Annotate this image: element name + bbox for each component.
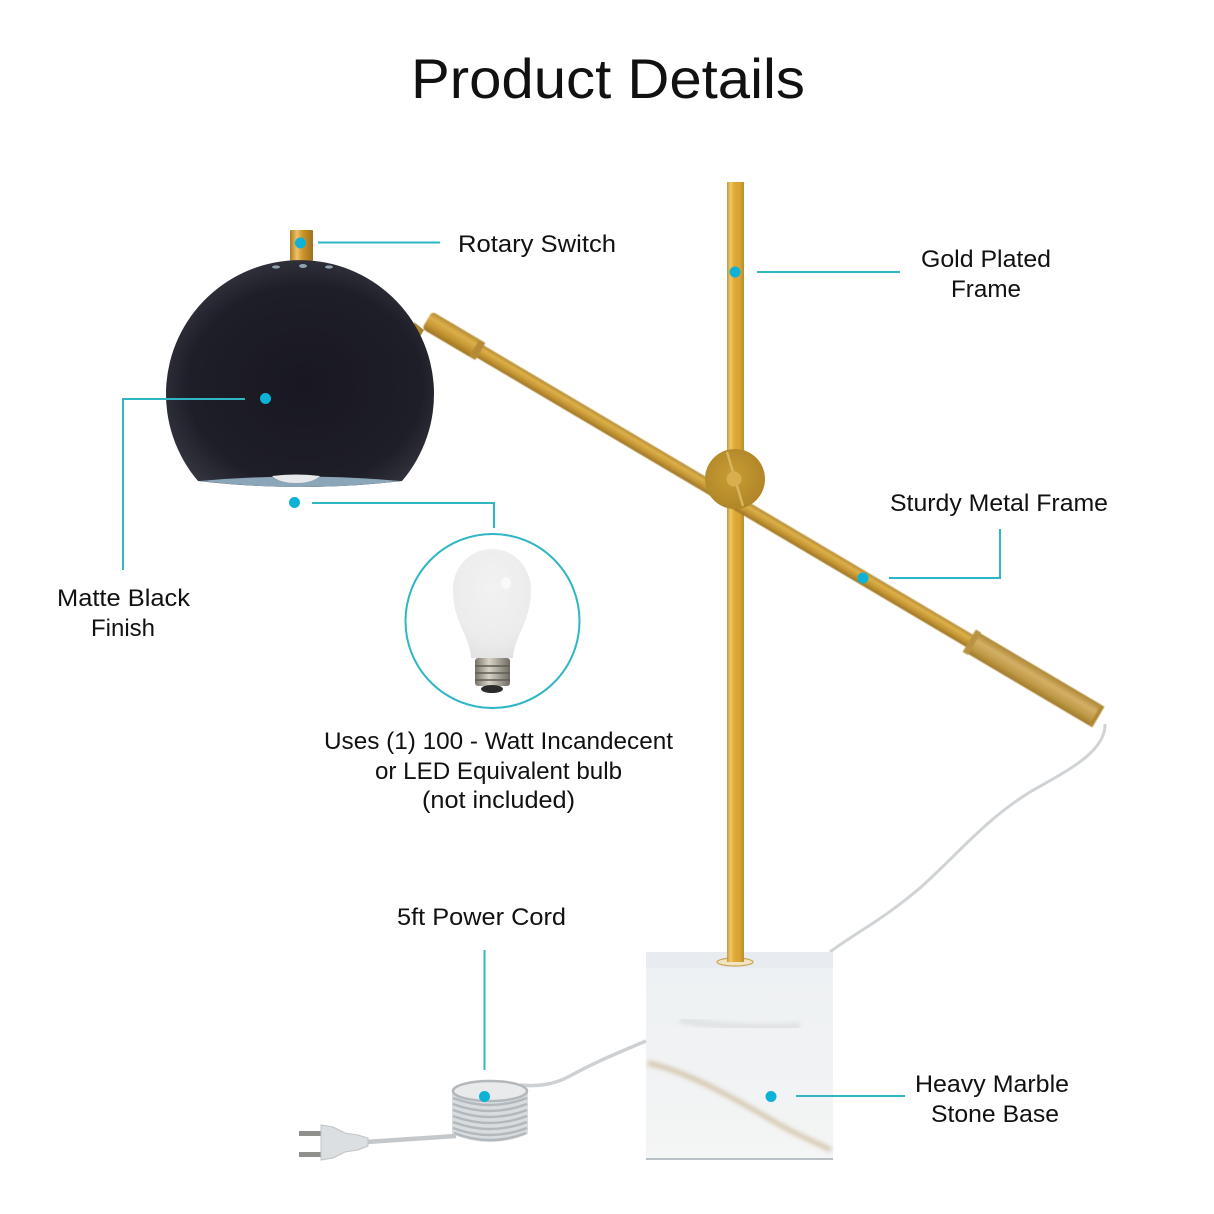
cord: run to base — [520, 1041, 646, 1086]
base: gray clouding — [680, 1020, 800, 1027]
callout: marble base: Heavy Marble — [915, 1071, 1069, 1098]
bulb callout — [406, 534, 580, 708]
shade: arm connector — [414, 322, 424, 340]
callout: marble base — [766, 1071, 1069, 1128]
lamp vertical gold pole — [727, 182, 744, 962]
callout: sturdy metal frame: Sturdy Metal Frame — [890, 490, 1108, 517]
callout: gold plated frame: Frame — [951, 276, 1021, 303]
title: Product Details — [411, 47, 805, 110]
base: marble veining — [648, 1063, 831, 1150]
bulb caption: (not included) — [422, 787, 575, 814]
bulb: glass globe — [453, 549, 531, 658]
callout: bulb leader line — [289, 497, 494, 528]
base: pole foot — [727, 940, 744, 962]
callout: sturdy metal frame — [858, 490, 1108, 584]
shade: inner rim — [200, 476, 400, 487]
bulb: highlight — [501, 577, 511, 589]
shade: rotary switch — [290, 230, 313, 261]
callout: matte black finish: Matte Black — [57, 585, 191, 612]
bulb caption: Uses (1) 100 - Watt Incandecent — [324, 728, 673, 755]
callout: rotary switch — [295, 231, 616, 258]
callout: matte black finish: Finish — [91, 615, 155, 642]
bulb: screw base — [475, 658, 510, 686]
pivot disc — [705, 449, 765, 509]
bulb: thread lines — [475, 666, 510, 680]
coiled power cord — [299, 1041, 646, 1160]
arm: slim rod — [475, 345, 976, 649]
base: stone block — [646, 952, 833, 1160]
callout: rotary switch: Rotary Switch — [458, 231, 616, 258]
bulb: contact tip — [481, 685, 503, 693]
lamp balance arm — [420, 309, 1105, 728]
marble base — [646, 940, 833, 1160]
arm: handle ring — [963, 630, 981, 655]
arm: counterweight handle — [967, 632, 1104, 727]
lamp shade — [166, 230, 434, 487]
shade: bulb tip — [272, 474, 320, 483]
base: top face edge — [646, 952, 833, 968]
arm: collar ring — [469, 339, 485, 360]
cord: coil body — [452, 1092, 528, 1142]
bulb caption: or LED Equivalent bulb — [375, 758, 622, 785]
bulb caption — [324, 728, 673, 814]
shade: vent holes — [272, 264, 333, 269]
cord: run to plug — [366, 1136, 456, 1142]
arm: shade collar — [422, 311, 482, 358]
callout: teal circle — [406, 534, 580, 708]
callout: power cord — [397, 904, 566, 1102]
lamp power cord: upper run — [830, 724, 1105, 952]
base: pole flange — [717, 958, 753, 966]
shade: black dome — [166, 260, 434, 487]
cord: coil — [453, 1081, 527, 1140]
base: bottom edge — [646, 1158, 833, 1160]
arm: end cap — [1089, 705, 1104, 727]
callout: matte black finish — [57, 393, 271, 642]
callout: light bulb — [453, 549, 531, 693]
callout: marble base: Stone Base — [931, 1101, 1059, 1128]
callout: gold plated frame — [730, 246, 1051, 303]
callout: gold plated frame: Gold Plated — [921, 246, 1051, 273]
callout: power cord: 5ft Power Cord — [397, 904, 566, 931]
cord: plug prongs — [299, 1131, 321, 1157]
cord: plug body — [321, 1125, 368, 1160]
